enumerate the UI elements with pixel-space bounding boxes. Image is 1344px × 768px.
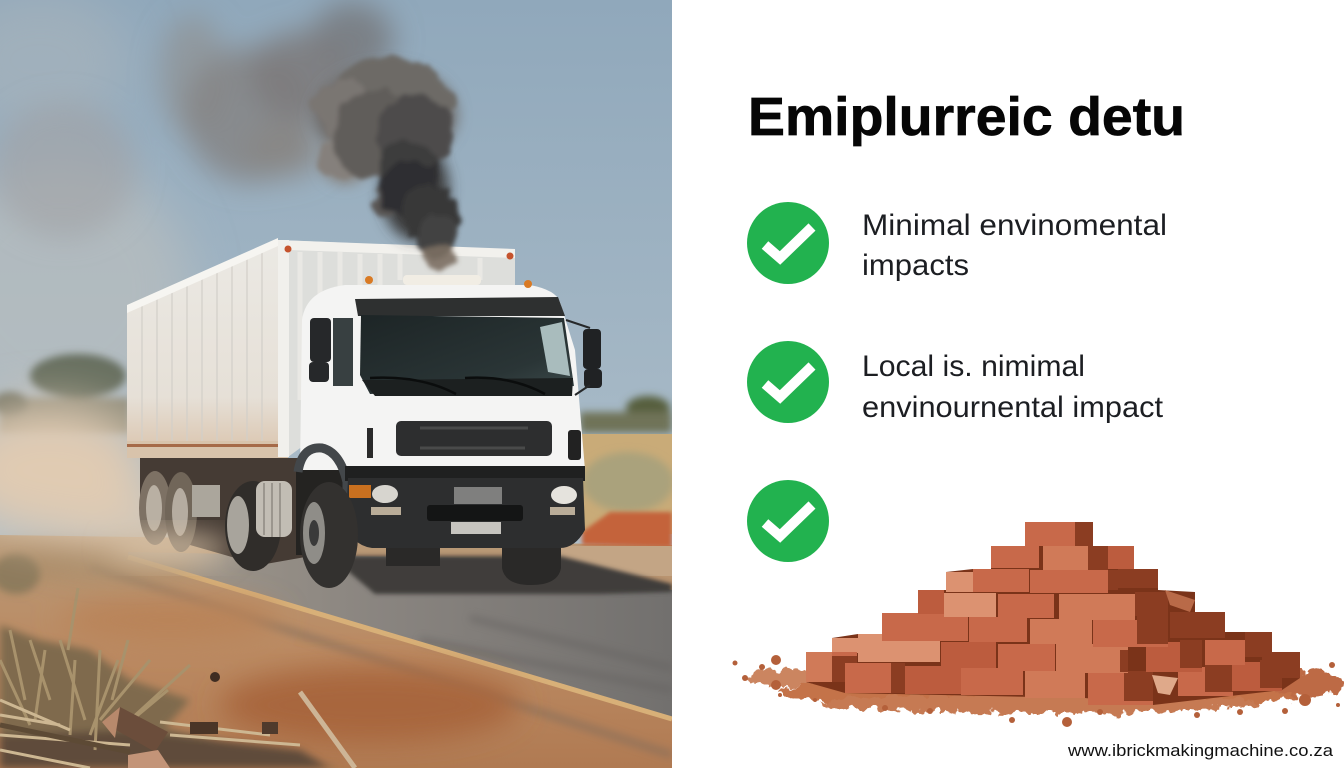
faint smoke haze — [0, 2, 394, 238]
cab body — [300, 285, 585, 470]
list item 1 — [747, 202, 1167, 284]
dead grass stalks — [0, 588, 355, 768]
text: minimal environmental impacts: impacts — [862, 249, 969, 282]
text: local minimal impact: envinournental impact — [862, 391, 1164, 424]
red dirt foreground — [0, 545, 520, 743]
box lower rail — [127, 441, 288, 458]
title: Emiplurreic detu — [748, 87, 1185, 147]
text: minimal environmental impacts: Minimal envinomental — [862, 209, 1167, 242]
windshield — [360, 315, 574, 394]
gravel band — [90, 566, 672, 755]
dust cloud behind truck — [0, 405, 215, 549]
dead grass mass — [0, 554, 340, 768]
text: local minimal impact: Local is. nimimal — [862, 350, 1085, 383]
brick pile — [732, 522, 1341, 727]
main black smoke plume — [315, 57, 460, 272]
right mirror — [583, 329, 601, 369]
plates and fog lights — [454, 487, 502, 504]
road edge line — [128, 557, 672, 719]
row 7 bricks — [806, 638, 1300, 705]
indicators — [349, 485, 371, 498]
text: minimal environmental impacts — [862, 209, 1167, 282]
under cab dark band — [345, 466, 585, 481]
icon: green check — [747, 202, 829, 284]
side steps — [192, 485, 220, 517]
side window — [333, 318, 353, 386]
dual rear wheels — [139, 471, 197, 552]
icon: third green check — [747, 480, 829, 562]
row 6 bricks — [858, 632, 1272, 673]
panel: right white background — [672, 0, 1344, 768]
box top rail — [127, 238, 278, 313]
headlights — [372, 485, 398, 503]
pile dark backing — [806, 522, 1300, 705]
panel: truck photo — [0, 0, 674, 768]
row 5 bricks — [882, 612, 1225, 647]
distant trees — [0, 354, 672, 434]
box front face — [278, 240, 515, 457]
list item 2 — [747, 341, 1164, 424]
top brick — [1025, 522, 1093, 546]
rear chassis shade — [140, 458, 303, 564]
cargo box side — [127, 246, 278, 441]
corrugation — [142, 247, 262, 457]
truck — [110, 238, 602, 588]
drive wheel — [225, 481, 281, 571]
roof markers — [284, 246, 532, 288]
front wheels — [300, 482, 561, 588]
wheel arch — [298, 448, 347, 500]
sun visor — [355, 297, 565, 316]
left sky haze — [0, 0, 190, 420]
low dust over rear wheels — [110, 534, 230, 562]
row 3 bricks — [946, 569, 1158, 593]
bumper — [346, 478, 585, 548]
grass clump — [582, 452, 674, 512]
left mirror — [310, 318, 331, 362]
fuel tank — [256, 481, 292, 537]
grille — [396, 421, 552, 456]
dark wiper strip — [362, 378, 573, 396]
red soil mound — [582, 512, 672, 548]
road streak — [422, 618, 542, 664]
smoke soft underlayer — [313, 65, 457, 240]
row 4 bricks — [918, 590, 1195, 620]
roof vent — [403, 275, 481, 285]
headlamp recess — [568, 430, 581, 460]
dirt ground — [0, 535, 672, 768]
text: local minimal impact — [862, 350, 1164, 424]
broken brick pieces — [102, 672, 278, 768]
website url: www.ibrickmakingmachine.co.za — [1067, 741, 1334, 760]
row 2 bricks — [991, 546, 1134, 570]
truck ground shadow — [330, 556, 672, 594]
under-cab shadow behind wheel — [296, 470, 346, 555]
icon: green check — [747, 341, 829, 423]
road — [128, 552, 672, 718]
rubble base — [732, 655, 1341, 727]
dry field — [580, 434, 672, 534]
